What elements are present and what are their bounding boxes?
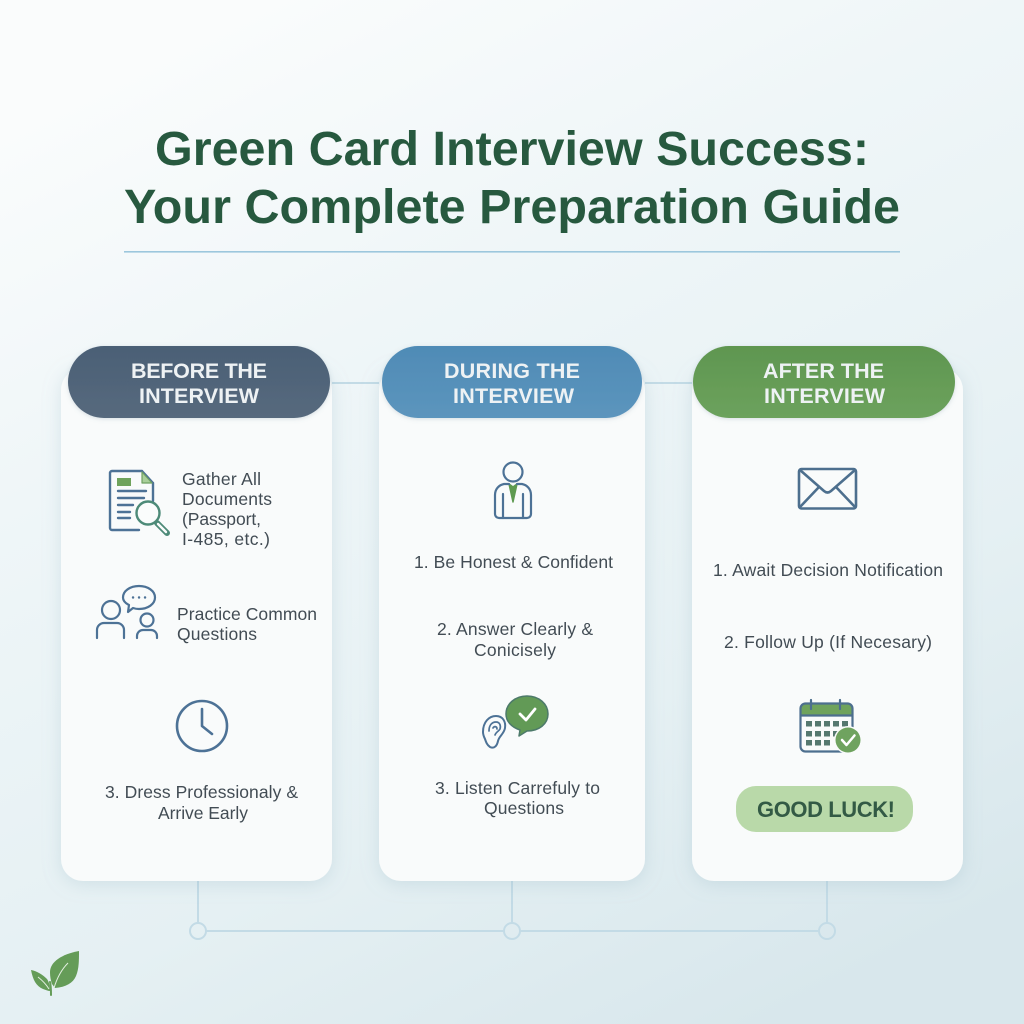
text: gather all documents: Documents: [182, 489, 272, 509]
text: practice common questions: Questions: [177, 624, 257, 644]
heading: after the interview: AFTER THE: [763, 359, 884, 383]
icon: ear and speech bubble: [483, 696, 548, 748]
connector lines: [190, 383, 835, 939]
heading: before the interview: BEFORE THE: [131, 359, 267, 383]
callout: good luck: GOOD LUCK!: [757, 797, 895, 822]
text: be honest: 1. Be Honest & Confident: [414, 552, 613, 572]
title: [124, 122, 900, 234]
text: practice common questions: Practice Common: [177, 604, 317, 624]
text: listen carefully: Questions: [484, 798, 564, 818]
text: dress professionally: Arrive Early: [158, 803, 248, 823]
text: await decision: 1. Await Decision Notification: [713, 560, 943, 580]
heading: during the interview: INTERVIEW: [453, 384, 575, 408]
panel: during the interview: [379, 346, 645, 881]
heading: during the interview: [382, 346, 642, 418]
text: answer clearly: [437, 619, 593, 660]
icon: people talking: [97, 586, 157, 638]
panel: before the interview: [61, 346, 332, 881]
text: gather all documents: I-485, etc.): [182, 529, 270, 549]
text: practice common questions: [177, 604, 317, 644]
heading: after the interview: [693, 346, 955, 418]
text: gather all documents: [182, 469, 272, 549]
icon: calendar with check: [800, 700, 862, 754]
icon: person in suit: [495, 462, 531, 518]
title: Your Complete Preparation Guide: [124, 180, 900, 234]
title: Green Card Interview Success:: [155, 122, 869, 176]
text: listen carefully: 3. Listen Carrefuly to: [435, 778, 600, 798]
heading: before the interview: INTERVIEW: [139, 384, 260, 408]
text: answer clearly: Conicisely: [474, 640, 556, 660]
heading: before the interview: [68, 346, 330, 418]
icon: clock: [177, 701, 227, 751]
text: listen carefully: [435, 778, 600, 818]
icon: document with magnifier: [110, 471, 167, 533]
panel: after the interview: [692, 346, 963, 881]
text: follow up: 2. Follow Up (If Necesary): [724, 632, 932, 652]
icon: envelope: [799, 469, 856, 508]
heading: after the interview: INTERVIEW: [764, 384, 886, 408]
text: gather all documents: (Passport,: [182, 509, 261, 529]
text: dress professionally: [105, 782, 298, 823]
text: answer clearly: 2. Answer Clearly &: [437, 619, 593, 639]
heading: during the interview: DURING THE: [444, 359, 580, 383]
icon: leaf logo: [31, 951, 79, 995]
text: dress professionally: 3. Dress Professionaly &: [105, 782, 298, 802]
text: gather all documents: Gather All: [182, 469, 261, 489]
callout: good luck: [736, 786, 913, 832]
